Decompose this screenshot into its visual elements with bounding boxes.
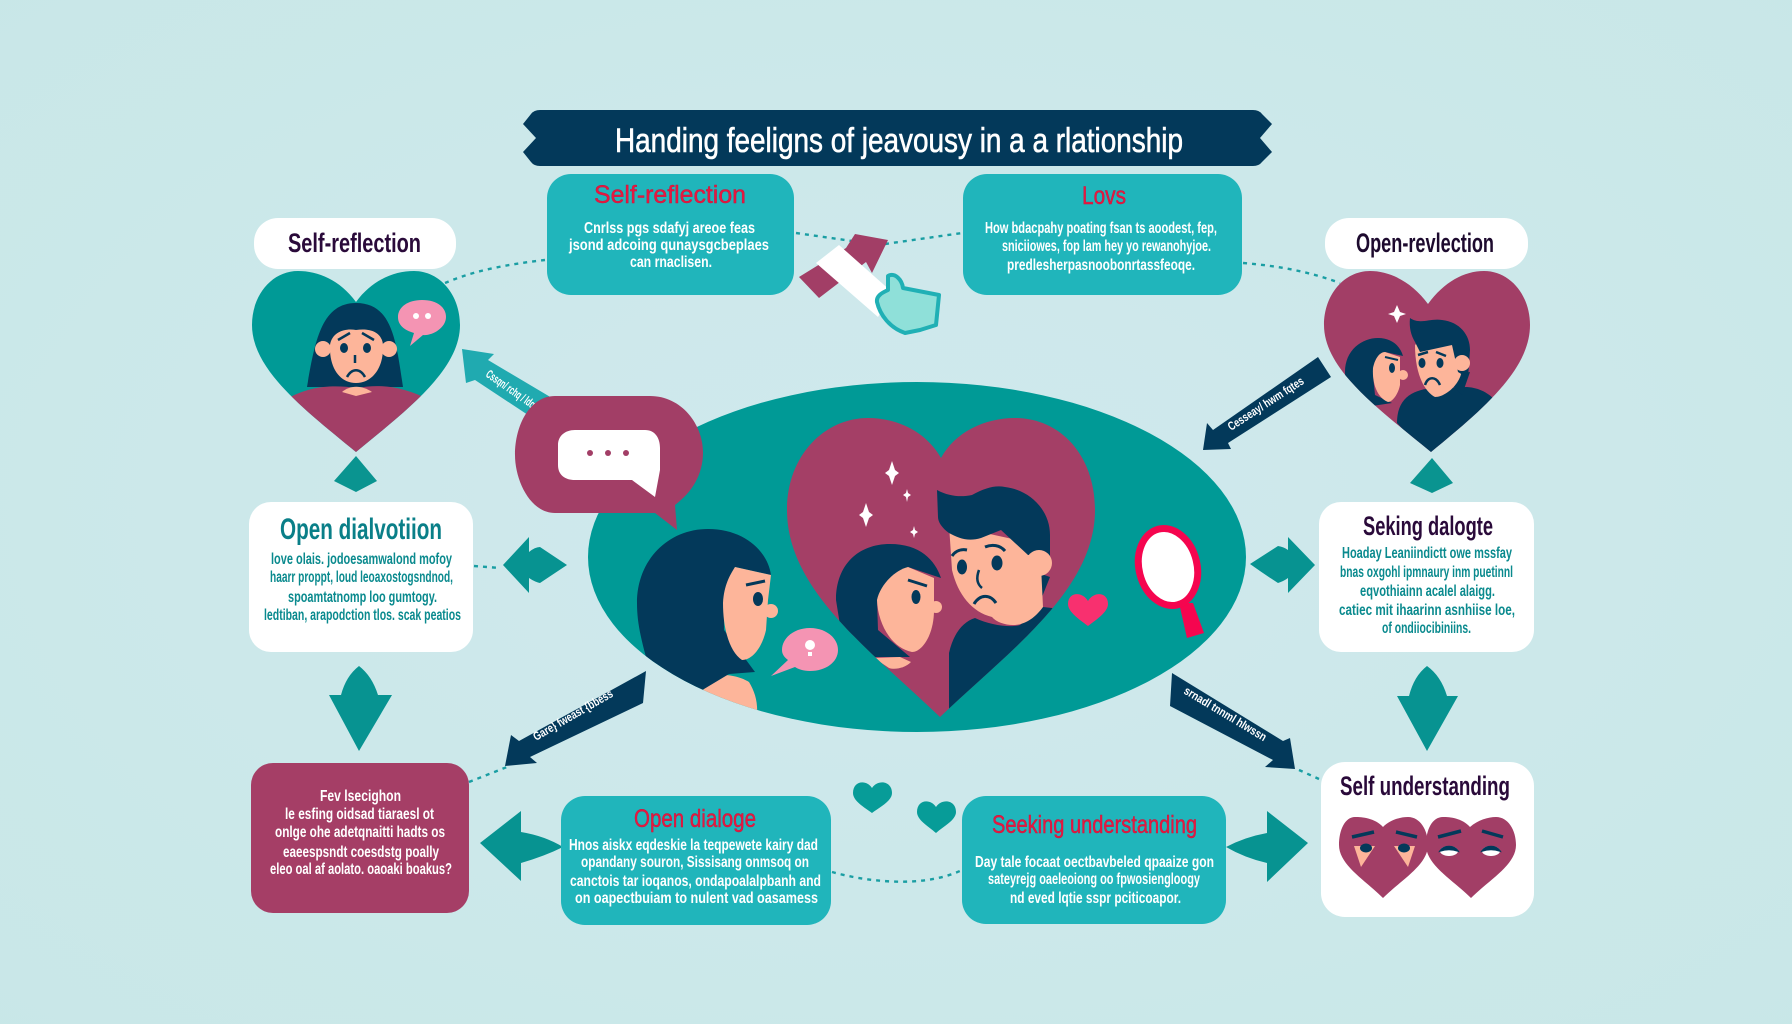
icon: left heart with sad woman [252, 271, 460, 460]
panel: maroon question: eleo oal af aolato. oaoaki boakus? [270, 861, 452, 878]
icon: small pink heart [1068, 594, 1108, 626]
panel: open dialvotiion white: spoamtatnomp loo gumtogy. [288, 589, 437, 606]
arrow: dark navy lower-left with text: Gare} fweast {bbess [530, 686, 616, 744]
panel: seking dalogte white: bnas oxgohl ipmnaury inm puetinnl [1340, 564, 1513, 581]
panel: seeking understanding teal: Seeking understanding [992, 811, 1197, 839]
icon: sparkles [859, 461, 918, 538]
panel: maroon question: Fev lsecighon [320, 788, 401, 805]
panel: seking dalogte white: eqvothiainn acalel alaigg. [1360, 583, 1495, 600]
panel: self-reflection teal: can rnaclisen. [630, 254, 712, 271]
arrow: dark navy toward ellipse from right heart [1203, 357, 1331, 450]
title banner: Handing feeligns of jeavousy in a a rlationship [615, 122, 1183, 160]
dotted connector lines [445, 233, 1340, 882]
pill: self-reflection: Self-reflection [288, 228, 421, 258]
arrow: teal up-left with text [462, 349, 552, 415]
pill: open-revlection [1325, 218, 1528, 269]
title banner [523, 110, 1272, 166]
panel: open dialoge teal: canctois tar ioqanos, ondapoalalpbanh and [570, 873, 821, 890]
panel: maroon question: eaeespsndt coesdstg poally [283, 844, 439, 861]
arrow: dark navy lower-right with text [1170, 673, 1295, 769]
panel: open dialvotiion white: haarr proppt, loud leoaxostogsndnod, [270, 569, 453, 586]
panel: self understanding white: Self understanding [1340, 771, 1510, 801]
arrow: chevron left middle [503, 537, 567, 593]
panel: seeking understanding teal: Day tale focaat oectbavbeled qpaaize gon [975, 854, 1214, 871]
panel: loves teal [963, 174, 1242, 295]
arrow: bottom right [1226, 811, 1308, 882]
icon: triangle pointer left [334, 456, 377, 492]
panel: open dialoge teal [561, 796, 831, 925]
panel: open dialvotiion white: love olais. jodoesamwalond mofoy [271, 551, 452, 568]
arrow: teal up-left with text: Cssqn/ rchq / ldqfq [483, 367, 544, 415]
panel: self-reflection teal: Self-reflection [594, 181, 746, 209]
arrow: chevron right middle [1250, 537, 1315, 593]
arrow: dark navy lower-right with text: srnadl tnnml hlwssn [1181, 684, 1269, 744]
panel: open dialoge teal: Open dialoge [634, 805, 756, 833]
icon: big heart [787, 418, 1095, 717]
panel: seking dalogte white: Seking dalogte [1363, 511, 1493, 541]
panel: open dialvotiion white: ledtiban, arapodction tlos. scak peatios [264, 607, 461, 624]
panel: open dialoge teal: on oapectbuiam to nulent vad oasamess [575, 890, 818, 907]
panel: self-reflection teal: Cnrlss pgs sdafyj areoe feas [584, 220, 755, 237]
panel: seeking understanding teal: sateyrejg oaeleoiong oo fpwosiengloogy [988, 871, 1200, 888]
panel: maroon question [251, 763, 469, 913]
panel: seeking understanding teal [962, 796, 1226, 924]
panel: loves teal: predlesherpasnoobonrtassfeoqe. [1007, 257, 1195, 274]
icon: right heart with couple [1324, 271, 1530, 460]
panel: open dialoge teal: Hnos aiskx eqdeskie la teqpewete kairy dad [569, 837, 818, 854]
panel: seking dalogte white [1319, 502, 1534, 652]
icon: hand mirror [1130, 522, 1206, 638]
panel: self understanding white [1321, 762, 1534, 917]
panel: maroon question: onlge ohe adetqnaitti hadts os [275, 824, 445, 841]
icons: small teal hearts [853, 782, 956, 833]
pill: open-revlection: Open-revlection [1356, 228, 1494, 258]
icon: two sad hearts [1339, 817, 1516, 898]
arrow: dark navy lower-left with text [505, 671, 646, 766]
arrow: down right [1397, 666, 1458, 751]
arrow: bottom left [480, 811, 563, 881]
icon: arrow with pointing hand [799, 234, 939, 333]
icon: triangle pointer right [1410, 458, 1453, 493]
panel: self-reflection teal: jsond adcoing qunaysgcbeplaes [568, 237, 769, 254]
panel: self-reflection teal [547, 174, 794, 295]
pill: self-reflection [254, 218, 456, 269]
panel: maroon question: le esfing oidsad tiaraesl ot [285, 806, 434, 823]
left woman [637, 529, 778, 716]
panel: open dialvotiion white [249, 502, 473, 652]
panel: loves teal: sniciiowes, fop lam hey yo rewanohyjoe. [1002, 238, 1211, 255]
couple inside heart [836, 486, 1052, 708]
panel: loves teal: How bdacpahy poating fsan ts aoodest, fep, [985, 220, 1217, 237]
arrow: down left [329, 666, 392, 751]
panel: open dialoge teal: opandany souron, Sissisang onmsoq on [581, 854, 809, 871]
panel: loves teal: Lovs [1082, 182, 1126, 210]
man's face details [952, 545, 1005, 604]
pink speech bubble [771, 628, 838, 676]
panel: open dialvotiion white: Open dialvotiion [280, 513, 442, 546]
central ellipse illustration [588, 382, 1246, 732]
panel: seking dalogte white: Hoaday Leaniindictt owe mssfay [1342, 545, 1512, 562]
arrow: dark navy toward ellipse from right heart: Cesseay/ hwm fqtes [1225, 374, 1307, 434]
panel: seking dalogte white: catiec mit ihaarinn asnhiise loe, [1339, 602, 1515, 619]
panel: seking dalogte white: of ondiiocibiniins. [1382, 620, 1471, 637]
icon: maroon speech bubble [515, 396, 703, 530]
panel: seeking understanding teal: nd eved lqtie sspr pciticoapor. [1010, 890, 1181, 907]
